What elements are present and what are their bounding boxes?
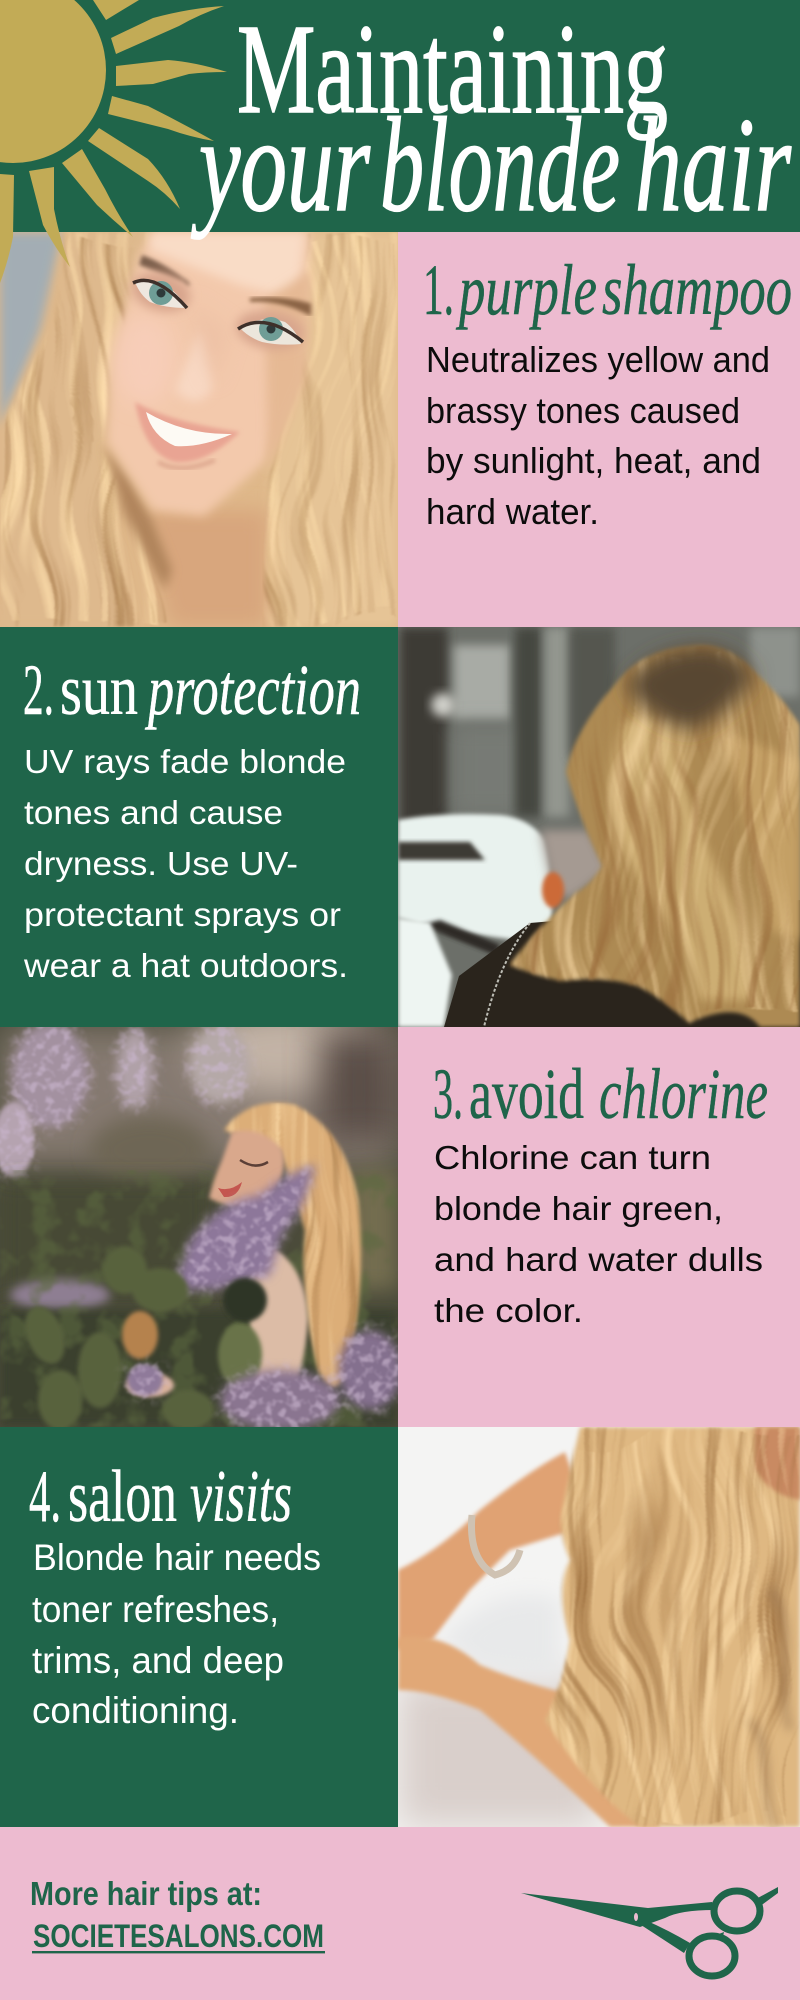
text: avoid chlorine body: and hard water dulls: [434, 1241, 763, 1278]
heading: 4. salon visits: [29, 1456, 292, 1538]
title: [191, 0, 791, 240]
text: sun protection body: UV rays fade blonde: [24, 743, 346, 780]
panel: salon visits background: [0, 1427, 398, 1827]
heading: 4. salon visits: visits: [190, 1456, 292, 1538]
heading: 4. salon visits: salon: [68, 1456, 177, 1538]
text: purple shampoo body: [426, 339, 770, 532]
photo: smiling blonde woman: [0, 232, 398, 627]
text: purple shampoo body: by sunlight, heat, and: [426, 440, 761, 481]
text: salon visits body: toner refreshes,: [32, 1589, 279, 1630]
text: avoid chlorine body: the color.: [434, 1292, 583, 1329]
heading: 2. sun protection: sun: [60, 650, 138, 730]
text: salon visits body: Blonde hair needs: [33, 1537, 321, 1578]
icon: scissors: [521, 1887, 778, 1976]
text: sun protection body: [23, 743, 348, 984]
panel: sun protection background: [0, 627, 398, 1027]
heading: 1. purple shampoo: [423, 250, 792, 330]
panel: footer background: [0, 1827, 800, 2000]
header band: [0, 0, 800, 232]
heading: 2. sun protection: protection: [144, 650, 361, 730]
panel: avoid chlorine background: [398, 1027, 800, 1427]
text: sun protection body: wear a hat outdoors.: [23, 947, 348, 984]
photo: woman among lilacs: [0, 1005, 406, 1434]
heading: 1. purple shampoo: 1.: [423, 250, 454, 330]
heading: 2. sun protection: 2.: [23, 650, 54, 730]
text: salon visits body: trims, and deep: [32, 1640, 284, 1681]
text: avoid chlorine body: blonde hair green,: [434, 1190, 723, 1227]
text: purple shampoo body: brassy tones caused: [426, 390, 740, 431]
heading: 3. avoid chlorine: 3.: [433, 1054, 463, 1134]
footer call to action: More hair tips at:: [30, 1875, 262, 1912]
text: sun protection body: dryness. Use UV-: [24, 845, 298, 882]
title: your: [191, 91, 370, 240]
icon: sun: [0, 0, 227, 283]
text: avoid chlorine body: [434, 1139, 763, 1329]
text: salon visits body: [32, 1537, 321, 1731]
text: avoid chlorine body: Chlorine can turn: [434, 1139, 711, 1176]
text: salon visits body: conditioning.: [32, 1690, 239, 1731]
photo: woman from behind on city street: [398, 627, 800, 1027]
panel: purple shampoo background: [398, 232, 800, 627]
heading: 3. avoid chlorine: [433, 1054, 768, 1134]
text: purple shampoo body: Neutralizes yellow and: [426, 339, 770, 380]
title: blonde: [380, 91, 620, 240]
text: purple shampoo body: hard water.: [426, 491, 599, 532]
footer call to action: SOCIETESALONS.COM: [33, 1918, 324, 1954]
footer call to action: [30, 1875, 325, 1954]
text: sun protection body: protectant sprays or: [24, 896, 341, 933]
heading: 3. avoid chlorine: avoid: [469, 1054, 584, 1134]
heading: 2. sun protection: [23, 650, 361, 730]
photo: wavy blonde hair from behind: [398, 1427, 800, 1827]
text: sun protection body: tones and cause: [24, 794, 283, 831]
heading: 4. salon visits: 4.: [29, 1456, 61, 1538]
heading: 1. purple shampoo: purple: [455, 250, 597, 330]
